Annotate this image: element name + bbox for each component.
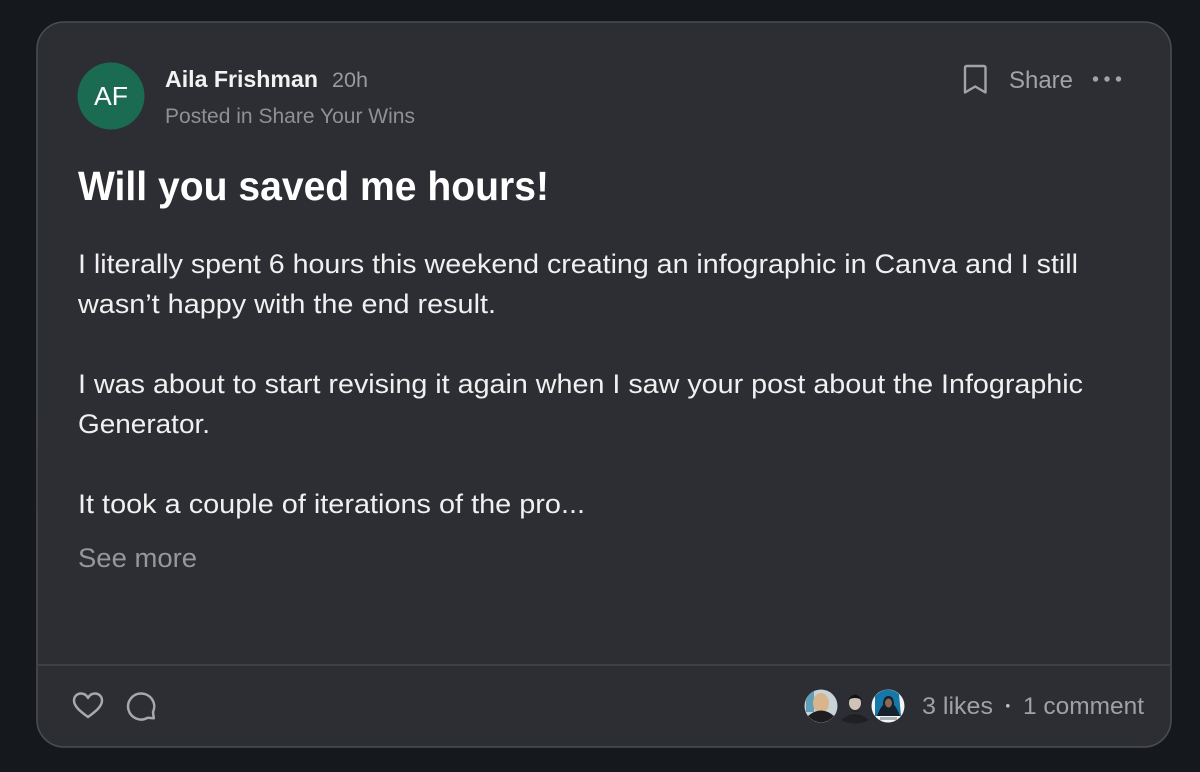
icon: more options dots	[1093, 76, 1121, 82]
post body text: It took a couple of iterations of the pro...	[78, 489, 585, 519]
post body text: wasn’t happy with the end result.	[77, 289, 496, 319]
icon: comment bubble	[128, 693, 154, 719]
post time: 20h	[332, 68, 368, 92]
icon: heart	[74, 694, 102, 717]
avatar: woman with blonde hair	[804, 690, 838, 722]
separator dot	[1006, 704, 1010, 708]
icon: bookmark	[965, 66, 986, 92]
avatar: woman in dark headscarf on poster	[872, 690, 904, 722]
footer divider	[38, 664, 1170, 666]
post body text: Generator.	[78, 409, 210, 439]
comment count: 1 comment	[1023, 693, 1144, 720]
post body text: I was about to start revising it again when I saw your post about the Infographic	[78, 369, 1083, 399]
avatar: man with dark hair	[838, 690, 872, 724]
see more link: See more	[78, 543, 197, 573]
avatar: AF initials: AF	[94, 81, 128, 111]
share label: Share	[1009, 67, 1073, 94]
post body text: I literally spent 6 hours this weekend creating an infographic in Canva and I still	[78, 249, 1078, 279]
liker avatars	[804, 690, 904, 724]
post body text	[77, 249, 1083, 519]
author name: Aila Frishman	[165, 66, 318, 92]
likes count: 3 likes	[922, 693, 993, 720]
avatar: AF initials	[78, 62, 144, 130]
post title: Will you saved me hours!	[78, 163, 549, 209]
posted in category: Posted in Share Your Wins	[165, 105, 415, 128]
